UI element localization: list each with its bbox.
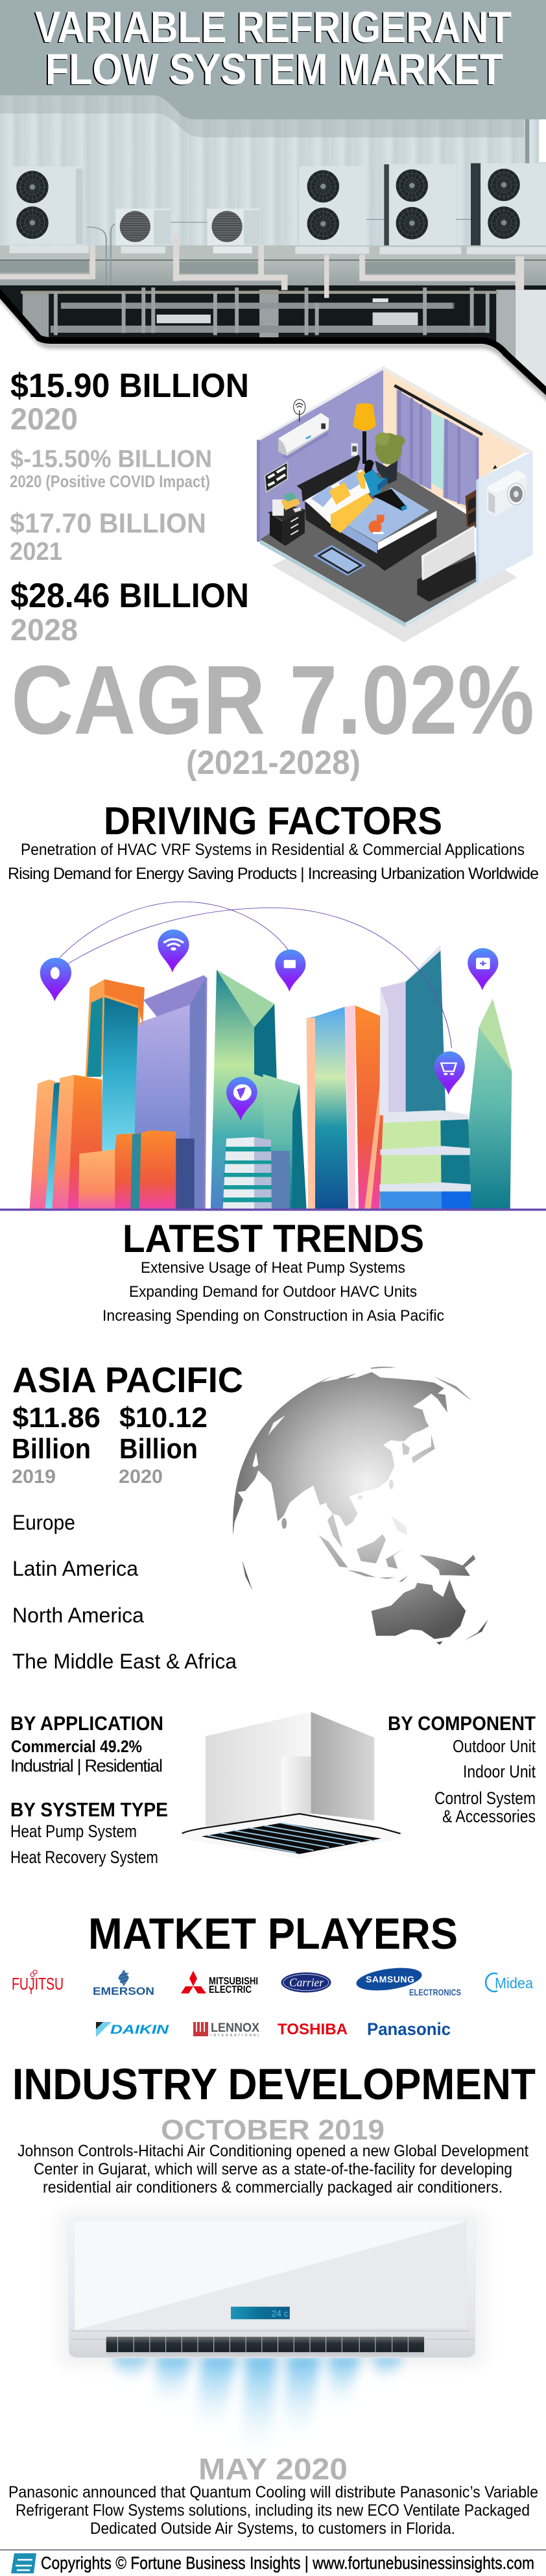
wall air conditioner [278, 413, 329, 459]
other regions list: Latin America [12, 1557, 138, 1580]
panel: by system type [10, 1798, 168, 1867]
panel: by system type: Heat Pump System [10, 1822, 137, 1841]
stat: COVID impact value: $-15.50% BILLION [10, 446, 212, 473]
date: May 2020: MAY 2020 [198, 2452, 348, 2486]
title [34, 3, 512, 95]
pin: globe [226, 1077, 257, 1133]
outdoor unit C [208, 209, 259, 254]
logo: Mitsubishi Electric [181, 1971, 258, 1995]
logo: Mitsubishi Electric: ELECTRIC [209, 1984, 252, 1995]
woman on bed [364, 460, 407, 511]
other regions list [12, 1511, 237, 1673]
outdoor unit F [467, 163, 546, 254]
logo: Toshiba: TOSHIBA [278, 2021, 348, 2038]
panel: by system type: BY SYSTEM TYPE [10, 1798, 168, 1821]
logo: Emerson [93, 1969, 154, 1997]
temperature display: 24 c [272, 2309, 289, 2318]
pin: shopping cart [434, 1052, 465, 1107]
logo: Daikin [96, 2022, 170, 2037]
May 2020 description: Dedicated Outside Air Systems, to customers in Florida. [90, 2520, 455, 2538]
illustration: ceiling cassette unit [182, 1712, 401, 1859]
pin: wifi [158, 930, 189, 985]
stat: COVID impact caption: 2020 (Positive COVID Impact) [10, 472, 210, 491]
Asia Pacific 2020 value: Billion [119, 1433, 198, 1465]
latest trends list: Extensive Usage of Heat Pump Systems [141, 1259, 405, 1277]
illustration: isometric bedroom [257, 366, 533, 642]
logo: Samsung Electronics: ELECTRONICS [409, 1987, 461, 1997]
wall mounted outdoor unit [486, 470, 527, 517]
panel: by application [10, 1712, 163, 1776]
May 2020 description [8, 2483, 538, 2538]
outdoor unit A [9, 167, 89, 253]
pin: chat [275, 950, 305, 1056]
illustration: globe centred on Asia Pacific [233, 1367, 488, 1645]
logo: Carrier: Carrier [289, 1976, 324, 1989]
pin: medical [468, 948, 498, 1004]
outdoor unit E [379, 164, 462, 254]
stat: 2028 value: $28.46 BILLION [10, 577, 249, 615]
pipes and conduits [0, 235, 524, 298]
Asia Pacific 2020 value: $10.12 [119, 1402, 208, 1434]
illustration: wall mounted air conditioner [59, 2211, 484, 2453]
temperature display [231, 2307, 290, 2319]
Asia Pacific 2019 value: $11.86 [12, 1402, 101, 1434]
logo: Fujitsu [12, 1970, 64, 1994]
stat: 2020 value: $15.90 BILLION [10, 367, 249, 405]
logo: Midea: Midea [495, 1975, 533, 1992]
driving factors list [8, 841, 539, 883]
Asia Pacific 2020 value: 2020 [119, 1466, 163, 1487]
logo: Mitsubishi Electric: MITSUBISHI [209, 1976, 258, 1987]
logo: Samsung Electronics [355, 1964, 461, 1997]
October 2019 description [18, 2142, 528, 2197]
skyline ground line [0, 1209, 546, 1210]
header banner [0, 0, 546, 119]
logo: Emerson: EMERSON [93, 1985, 154, 1997]
illustration: city skyline with pins [30, 902, 512, 1209]
tv and cabinet [417, 525, 475, 602]
date: October 2019: OCTOBER 2019 [161, 2114, 385, 2146]
latest trends list [102, 1259, 444, 1325]
pin: location [40, 957, 71, 1065]
photo black frame [0, 290, 546, 401]
other regions list: The Middle East & Africa [12, 1650, 237, 1673]
other regions list: North America [12, 1604, 144, 1627]
October 2019 description: residential air conditioners & commercially packaged air conditioners. [43, 2178, 503, 2197]
logo: Fujitsu: FUJITSU [12, 1974, 64, 1993]
stat: 2020 year: 2020 [10, 402, 78, 436]
outdoor unit B [115, 209, 171, 254]
latest trends list: Expanding Demand for Outdoor HAVC Units [129, 1283, 417, 1301]
panel: by application: Commercial 49.2% [11, 1737, 142, 1756]
connection arcs [59, 902, 451, 1048]
logo: Daikin: DAIKIN [110, 2023, 170, 2037]
stat: 2028 year: 2028 [10, 612, 78, 647]
heading: driving factors: DRIVING FACTORS [104, 799, 442, 843]
Asia Pacific 2020 value [119, 1402, 208, 1487]
logo: Lennox: INTERNATIONAL [211, 2034, 259, 2038]
logo: Carrier [281, 1972, 331, 1993]
rug [313, 545, 366, 576]
stat: 2021 value: $17.70 BILLION [10, 508, 206, 539]
stat: 2021 year: 2021 [10, 538, 62, 566]
market size stats [10, 367, 249, 647]
October 2019 description: Center in Gujarat, which will serve as a state-of-the-facility for developing [34, 2160, 512, 2178]
panel: by application: Industrial | Residential [10, 1756, 163, 1776]
Asia Pacific 2019 value [12, 1402, 101, 1487]
other regions list: Europe [12, 1511, 75, 1534]
panel: by component [388, 1712, 536, 1826]
driving factors list: Rising Demand for Energy Saving Products | Increasing Urbanization Worldwide [8, 865, 539, 883]
cat [368, 513, 385, 534]
footer logo [11, 2553, 36, 2573]
heading: market players: MATKET PLAYERS [88, 1909, 458, 1958]
Asia Pacific 2019 value: 2019 [12, 1466, 56, 1487]
heading: latest trends: LATEST TRENDS [123, 1217, 424, 1260]
CAGR period: (2021-2028) [186, 744, 361, 782]
heading: Asia Pacific: ASIA PACIFIC [12, 1360, 243, 1400]
panel: by system type: Heat Recovery System [10, 1848, 158, 1867]
panel: by application: BY APPLICATION [10, 1712, 163, 1735]
outdoor unit D [295, 166, 369, 254]
logo: Lennox [193, 2021, 259, 2038]
logo: Lennox: LENNOX [211, 2021, 259, 2035]
nightstand [268, 492, 307, 546]
logo: Panasonic: Panasonic [367, 2019, 451, 2039]
latest trends list: Increasing Spending on Construction in Asia Pacific [102, 1307, 444, 1325]
hero photo: rooftop air conditioning units [0, 95, 546, 387]
logo: Samsung Electronics: SAMSUNG [366, 1974, 414, 1984]
Asia Pacific 2019 value: Billion [12, 1433, 91, 1465]
